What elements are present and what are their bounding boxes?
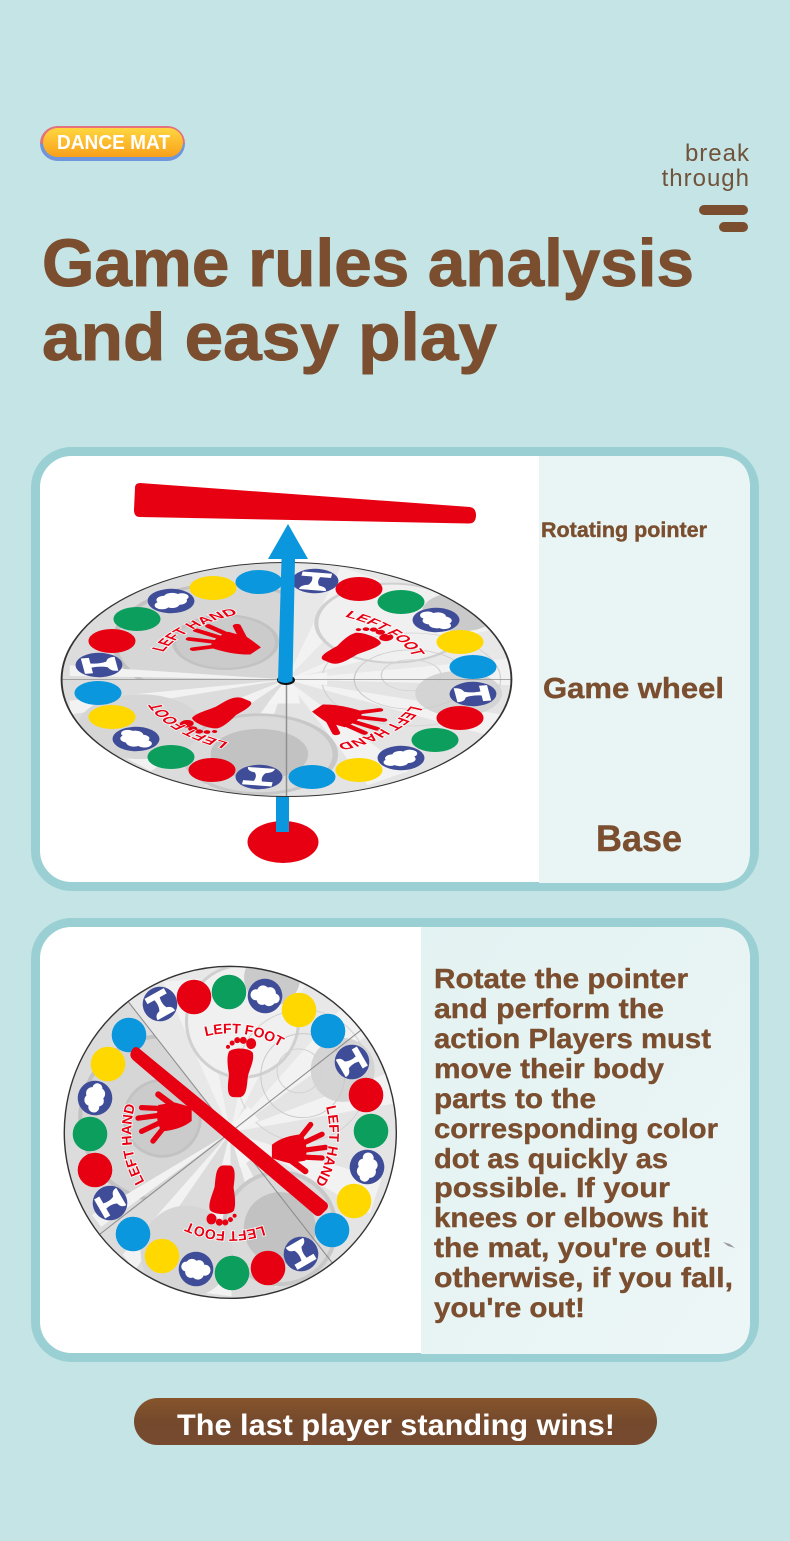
rules text: knees or elbows hit — [434, 1202, 708, 1233]
badge: DANCE MAT: DANCE MAT — [57, 132, 170, 154]
badge: DANCE MAT — [40, 126, 185, 161]
game wheel — [60, 562, 512, 797]
label: game wheel: Game wheel — [543, 673, 724, 705]
rules text: otherwise, if you fall, — [434, 1262, 733, 1293]
label: rotating pointer: Rotating pointer — [541, 519, 707, 542]
rules text: Rotate the pointer — [434, 963, 688, 994]
speck — [723, 1242, 735, 1248]
wheel artwork: LEFT HAND — [120, 1104, 145, 1186]
title: Game rules analysis — [42, 226, 694, 301]
base stand — [248, 796, 318, 863]
wheel artwork: LEFT HAND — [339, 706, 424, 750]
callout: winner banner — [134, 1398, 657, 1445]
color dots — [73, 567, 499, 791]
wheel artwork: LEFT FOOT — [146, 704, 229, 749]
wheel hub — [277, 675, 295, 685]
wheel artwork: LEFT FOOT — [183, 1222, 266, 1242]
arrow: blue spindle — [268, 524, 308, 683]
rules text — [434, 963, 733, 1323]
top-down game wheel — [64, 966, 397, 1299]
wheel artwork: LEFT HAND — [150, 608, 236, 652]
rules text: dot as quickly as — [434, 1143, 668, 1174]
wheel artwork: LEFT HAND — [316, 1104, 340, 1186]
icon: brand bars — [699, 205, 748, 232]
rules text: possible. If your — [434, 1172, 670, 1203]
pointer bar — [130, 1047, 328, 1216]
brand text: break through: break — [685, 140, 750, 167]
brand text: break through — [662, 140, 750, 192]
rules text: move their body — [434, 1053, 664, 1084]
callout: winner banner: The last player standing wins! — [177, 1409, 615, 1442]
brand text: break through: through — [662, 165, 750, 192]
rules text: action Players must — [434, 1023, 711, 1054]
rules text: and perform the — [434, 993, 664, 1024]
rules text: the mat, you're out! — [434, 1232, 712, 1263]
wheel artwork: LEFT FOOT — [204, 1023, 286, 1046]
color dots — [73, 975, 388, 1290]
label: base: Base — [596, 818, 682, 859]
pointer bar — [134, 483, 476, 524]
panel: game parts — [31, 447, 759, 891]
panel: how to play — [31, 918, 759, 1362]
wheel artwork — [64, 966, 397, 1299]
rules text: corresponding color — [434, 1113, 718, 1144]
title: and easy play — [42, 300, 497, 375]
wheel artwork — [60, 562, 512, 797]
rules text: parts to the — [434, 1083, 596, 1114]
wheel artwork: LEFT FOOT — [344, 610, 426, 654]
rules text: you're out! — [434, 1292, 585, 1323]
title — [42, 226, 694, 375]
